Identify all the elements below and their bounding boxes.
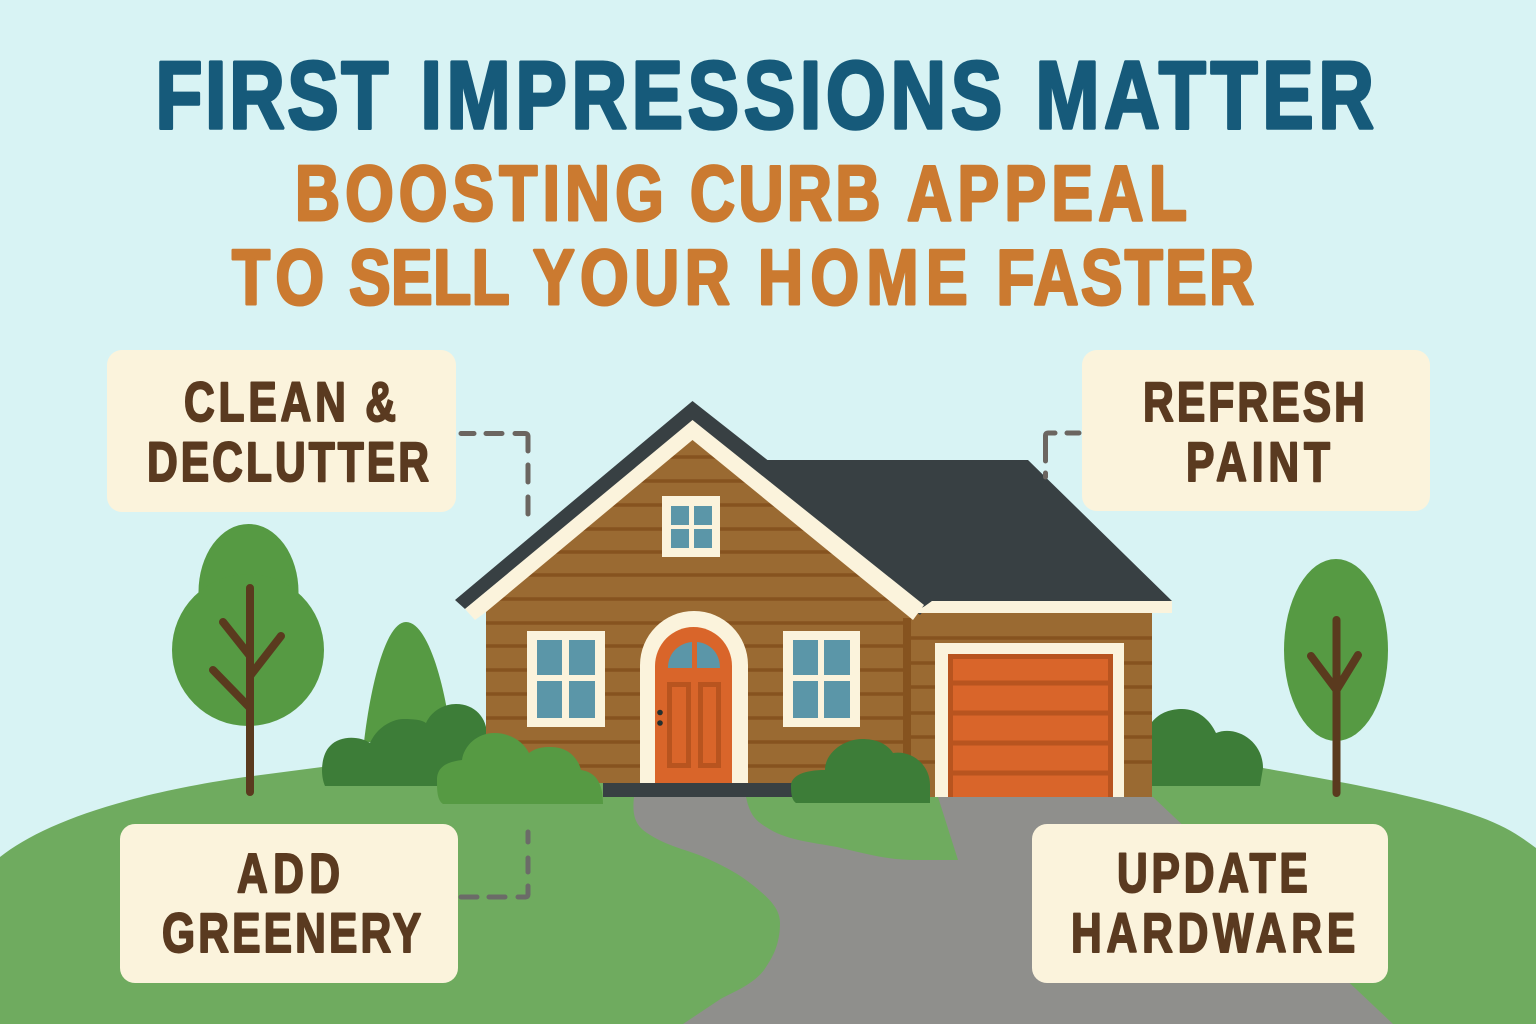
shrub: dark right: [1152, 709, 1263, 786]
shrub: front left: [437, 733, 603, 804]
front door: [640, 611, 748, 783]
card: refresh paint: REFRESH: [1143, 370, 1365, 433]
card: update hardware: UPDATE: [1117, 841, 1308, 904]
subtitle: APPEAL: [907, 149, 1187, 237]
card: add greenery: [120, 824, 458, 983]
card: clean and declutter: CLEAN &: [184, 370, 396, 433]
connector: clean to house: [461, 434, 528, 514]
right window: [783, 631, 860, 727]
subtitle: CURB: [690, 149, 880, 237]
card: clean and declutter: DECLUTTER: [147, 430, 429, 493]
subtitle: [232, 149, 1254, 321]
title: MATTER: [1036, 42, 1374, 149]
shrub: dark left: [322, 704, 487, 786]
main roof: [700, 420, 1172, 615]
title: IMPRESSIONS: [420, 42, 1002, 149]
gable window: [662, 496, 720, 557]
card: add greenery: ADD: [237, 842, 340, 905]
shrub: cone: [364, 622, 447, 745]
front step: [603, 783, 793, 797]
tree: right: [1284, 559, 1388, 793]
garage trim band: [913, 601, 1172, 613]
garage door: [935, 643, 1124, 797]
card: add greenery: GREENERY: [162, 901, 421, 964]
card: update hardware: HARDWARE: [1071, 901, 1355, 964]
ground: lawn: [0, 767, 1536, 1024]
subtitle: YOUR: [533, 233, 730, 321]
tree: left: [172, 524, 324, 792]
subtitle: FASTER: [996, 233, 1254, 321]
subtitle: TO: [232, 233, 324, 321]
driveway: [633, 797, 1393, 1024]
subtitle: HOME: [758, 233, 968, 321]
lawn island: [746, 797, 958, 860]
subtitle: SELL: [349, 233, 510, 321]
house: [455, 401, 1172, 797]
card: refresh paint: PAINT: [1186, 430, 1330, 493]
gable wall: [480, 430, 915, 783]
title: FIRST: [156, 42, 388, 149]
left window: [527, 631, 605, 727]
corner post: [903, 618, 911, 783]
connector: paint to house: [1046, 433, 1079, 477]
siding lines: [486, 457, 1152, 766]
card: update hardware: [1032, 824, 1388, 983]
connector: greenery to house: [461, 832, 528, 897]
title: [156, 42, 1374, 149]
roof trim cream: [465, 420, 924, 620]
garage wall: [900, 610, 1152, 797]
roof edge dark: [455, 401, 770, 609]
subtitle: BOOSTING: [295, 149, 664, 237]
card: clean and declutter: [107, 350, 456, 512]
shrub: front centre: [791, 739, 930, 803]
card: refresh paint: [1082, 350, 1430, 511]
